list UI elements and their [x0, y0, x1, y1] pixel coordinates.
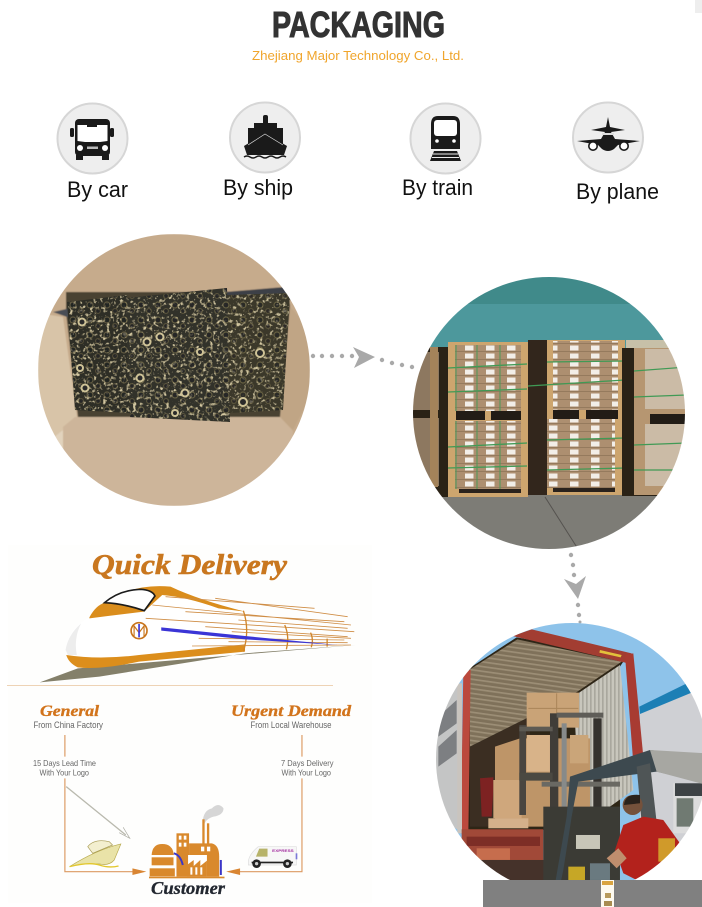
- column: general: With Your Logo: [40, 768, 89, 778]
- arrow: pallets to container: [564, 553, 586, 624]
- subtitle: Zhejiang Major Technology Co., Ltd.: [252, 49, 464, 63]
- column: general: [33, 703, 104, 778]
- panel: quick delivery: [7, 545, 372, 903]
- corner scrollbar stub: [695, 0, 702, 13]
- left white wall: [436, 686, 458, 830]
- icon: express van: [248, 847, 297, 868]
- icon: plane: [573, 102, 643, 172]
- person inside: [480, 777, 493, 817]
- title: PACKAGING: [272, 4, 445, 45]
- column: general: 15 Days Lead Time: [33, 759, 96, 768]
- column: urgent demand: With Your Logo: [282, 768, 331, 778]
- label: by train: By train: [402, 175, 473, 200]
- column: urgent demand: [231, 703, 352, 778]
- left partial stack: [413, 347, 448, 497]
- photo: forklift loading container: [436, 623, 702, 880]
- icon: ship: [230, 102, 300, 172]
- grey footer bar: [483, 880, 702, 907]
- label: by car: By car: [67, 177, 128, 202]
- icon: bus: [58, 104, 128, 174]
- heading: quick delivery: Quick Delivery: [92, 550, 288, 581]
- icon: train: [410, 104, 480, 174]
- icon: express van: EXPRESS: [272, 849, 294, 853]
- cartons: [527, 693, 579, 728]
- label: by ship: By ship: [223, 175, 293, 200]
- plastic bags of parts: [67, 288, 290, 422]
- building: [640, 683, 702, 843]
- divider line: [7, 685, 333, 686]
- thumbnail in footer: [601, 880, 614, 907]
- icon: cruise ship: [70, 841, 121, 867]
- pallet stack C: [528, 340, 625, 495]
- icon: factory: [149, 805, 224, 878]
- driver: [615, 817, 680, 880]
- arrow: carton to pallets: [311, 347, 414, 369]
- pallet stack D: [622, 340, 687, 496]
- container interior: [467, 637, 627, 830]
- photo: stacked pallets in warehouse: [413, 277, 687, 550]
- label: customer: Customer: [151, 878, 226, 898]
- column: general: General: [40, 703, 100, 720]
- container red frame: [513, 629, 632, 663]
- panel: transport options: [58, 102, 659, 204]
- photo: carton of bagged parts: [38, 234, 310, 506]
- column: urgent demand: 7 Days Delivery: [281, 759, 334, 768]
- illustration: bullet train: [40, 585, 356, 682]
- column: urgent demand: Urgent Demand: [231, 703, 352, 720]
- label: by plane: By plane: [576, 179, 659, 204]
- forklift overhead guard: [556, 750, 664, 880]
- pallet stack B: [448, 342, 528, 497]
- forklift mast: [550, 713, 558, 807]
- flow lines and arrows: [65, 735, 302, 875]
- column: general: From China Factory: [34, 720, 104, 730]
- column: urgent demand: From Local Warehouse: [250, 720, 332, 730]
